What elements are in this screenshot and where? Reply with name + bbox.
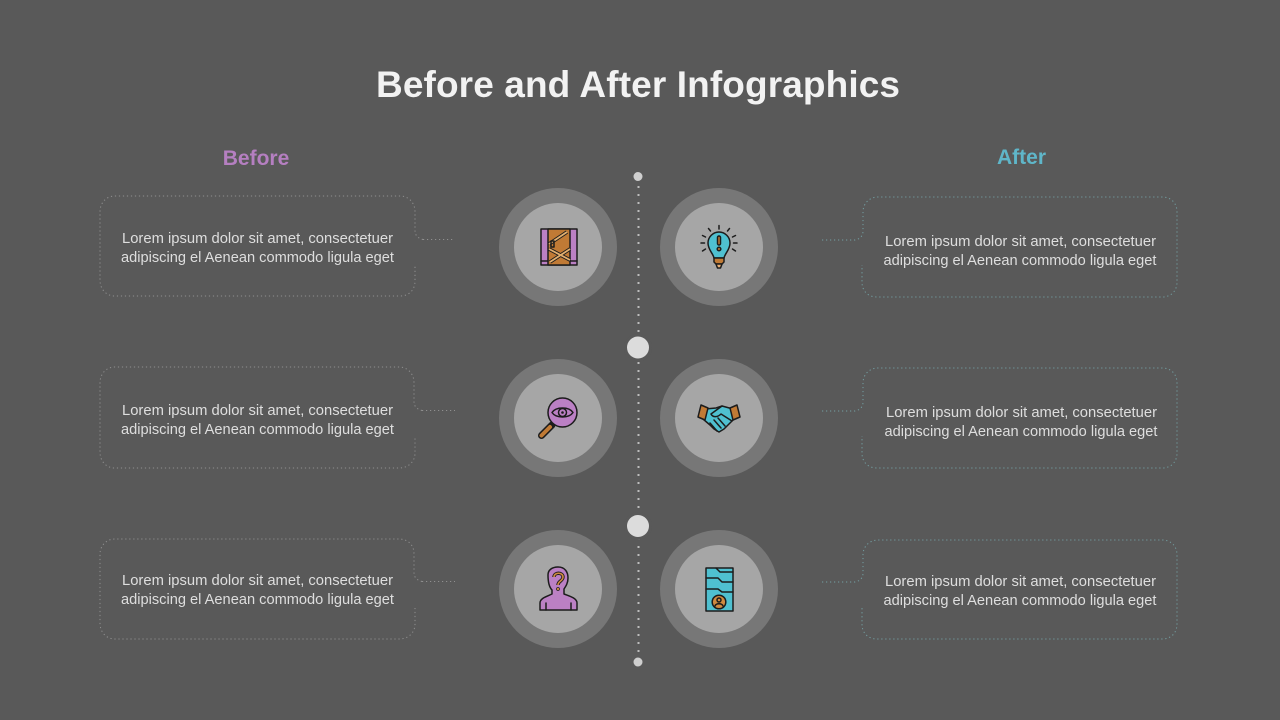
icon: taped-off door	[499, 188, 617, 306]
heading: After: After	[997, 146, 1046, 169]
panel: after 2	[822, 368, 1177, 468]
panel: before 2	[100, 367, 455, 468]
icon: light bulb	[660, 188, 778, 306]
panel: before 3	[100, 539, 455, 639]
panel: before 1	[100, 196, 455, 296]
central timeline	[624, 172, 652, 666]
panel: after 3: Lorem ipsum dolor sit amet, consectetuer	[885, 574, 1156, 590]
heading: Before: Before	[223, 147, 289, 170]
panel: after 2: Lorem ipsum dolor sit amet, consectetuer	[886, 405, 1157, 421]
icon: person with question mark	[499, 530, 617, 648]
title: Before and After Infographics	[376, 64, 900, 105]
panel: before 1: Lorem ipsum dolor sit amet, consectetuer	[122, 231, 393, 247]
panel: after 2: adipiscing el Aenean commodo ligula eget	[884, 424, 1158, 440]
panel: before 3: adipiscing el Aenean commodo ligula eget	[121, 592, 394, 608]
panel: before 1: adipiscing el Aenean commodo ligula eget	[121, 250, 394, 266]
panel: after 1: adipiscing el Aenean commodo ligula eget	[884, 253, 1156, 269]
panel: before 2: adipiscing el Aenean commodo ligula eget	[121, 422, 394, 438]
icon: handshake	[660, 359, 778, 477]
panel: before 2: Lorem ipsum dolor sit amet, consectetuer	[122, 403, 393, 419]
panel: before 3: Lorem ipsum dolor sit amet, consectetuer	[122, 573, 393, 589]
panel: after 1	[822, 197, 1177, 297]
panel: after 3: adipiscing el Aenean commodo ligula eget	[884, 593, 1156, 609]
icon: document with profile	[660, 530, 778, 648]
panel: after 3	[822, 540, 1177, 639]
icon: magnifier with eye	[499, 359, 617, 477]
panel: after 1: Lorem ipsum dolor sit amet, consectetuer	[885, 234, 1156, 250]
